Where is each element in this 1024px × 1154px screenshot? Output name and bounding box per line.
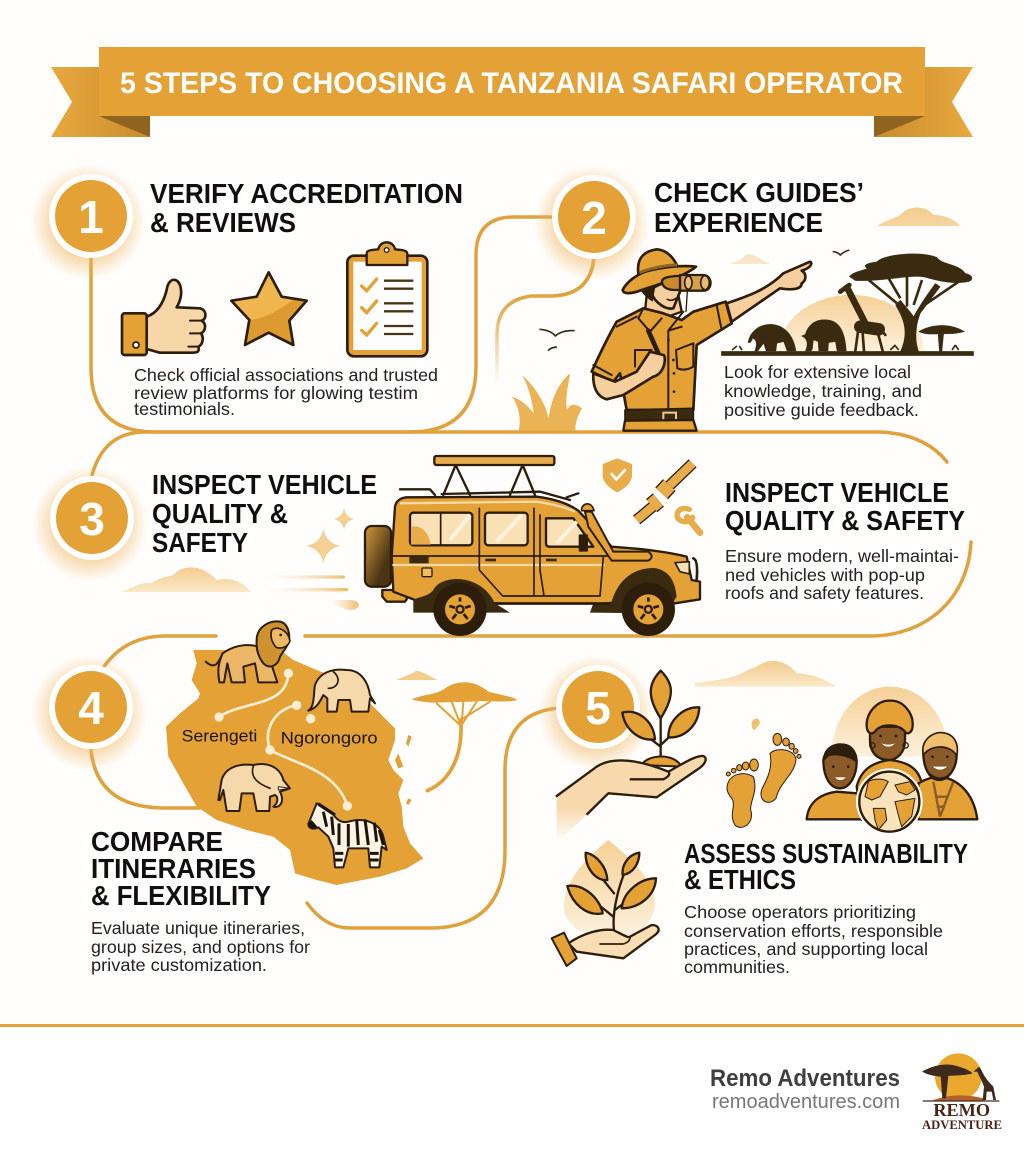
step 3 number badge: 3: [79, 493, 105, 545]
step 5 number badge: 5: [585, 682, 611, 734]
step 1 heading: & REVIEWS: [150, 207, 296, 238]
acacia trunk and branches: [895, 283, 940, 352]
step 4 heading: ITINERARIES: [91, 853, 256, 884]
community backdrop: [832, 687, 948, 757]
route lines: [219, 673, 347, 806]
guide: buttons: [667, 339, 675, 393]
front wheel: [622, 583, 675, 636]
sun: [779, 295, 924, 352]
panel: step 3: [32, 456, 965, 636]
step 5 body text: communities.: [684, 957, 790, 977]
step 2 heading: CHECK GUIDES’: [654, 177, 864, 208]
step 1 number badge: [30, 164, 146, 280]
step 3 body text: [725, 546, 959, 603]
guide: shirt details: [593, 305, 722, 410]
brand URL: remoadventures.com: [712, 1091, 900, 1113]
step 5 number badge: [538, 655, 654, 771]
step 3 body text: Ensure modern, well-maintai-: [725, 546, 959, 566]
connector path: step 4 top: [103, 636, 216, 668]
step 2 heading: EXPERIENCE: [654, 207, 823, 238]
step 1 body text: [134, 365, 438, 419]
step 2 number badge: 2: [581, 192, 607, 244]
connector path: step 3 around vehicle: [92, 432, 971, 636]
top hand: [557, 756, 706, 843]
savanna clouds: [729, 207, 960, 264]
panel: step 1: [30, 164, 463, 419]
step 4 body text: [91, 918, 310, 975]
roof rack: [400, 465, 578, 500]
connector path: step 4 bottom: [91, 750, 200, 808]
illustrations: hands, footprints, community, globe: [552, 661, 977, 966]
panel: step 4: [31, 621, 517, 975]
step 2 body text: Look for extensive local: [724, 362, 911, 382]
mirror: [579, 534, 588, 552]
guide: belt: [625, 408, 693, 421]
logo: ADVENTURE: [922, 1118, 1002, 1132]
illustration: savanna scene: [512, 207, 974, 431]
step 3 number badge: [32, 466, 148, 582]
map of Tanzania: [166, 650, 423, 885]
guide: forearm and hand: [593, 352, 665, 399]
step 5 heading: [684, 838, 968, 895]
body: [392, 497, 700, 603]
step 4 heading: & FLEXIBILITY: [91, 880, 271, 911]
acacia canopy: [849, 254, 972, 283]
logo: REMO: [933, 1100, 990, 1120]
connector path: step 2 downward: [497, 258, 594, 385]
man: [918, 733, 977, 819]
step 3 body text: roofs and safety features.: [725, 583, 924, 603]
guide: strap: [648, 331, 658, 353]
step 3 right heading: INSPECT VEHICLE: [725, 477, 949, 508]
windows: [410, 513, 472, 545]
step 1 body text: review platforms for glowing testim: [134, 383, 418, 403]
step 2 body text: positive guide feedback.: [724, 400, 919, 420]
elephant north: [308, 670, 375, 712]
panel: step 5: [538, 655, 977, 977]
lower plant in hand: [552, 840, 659, 966]
wrench icon: [677, 508, 700, 533]
doors: [393, 508, 610, 596]
step 4 body text: private customization.: [91, 955, 267, 975]
elephant south: [218, 764, 290, 811]
roof highlight and stripe: [392, 502, 605, 565]
guide: pointing arm: [727, 262, 811, 322]
step 5 body text: Choose operators prioritizing: [684, 902, 916, 922]
step 4 heading: [91, 826, 271, 911]
logo: [922, 1053, 1002, 1132]
step 5 body text: practices, and supporting local: [684, 939, 928, 959]
grass: [512, 373, 582, 431]
rear bumper: [382, 590, 407, 602]
sparkles, cloud and speed lines: [122, 508, 359, 610]
step 4 number badge: 4: [78, 682, 104, 734]
rear wheel: [433, 583, 487, 636]
boy: [807, 743, 867, 819]
guide: binoculars: [662, 276, 682, 290]
seatbelt icon: [637, 463, 693, 520]
step 2 body text: knowledge, training, and: [724, 381, 922, 401]
step 4 heading: COMPARE: [91, 826, 223, 857]
step 5 heading: & ETHICS: [684, 864, 796, 895]
step 5 body text: conservation efforts, responsible: [684, 921, 943, 941]
title banner: [51, 47, 973, 137]
headlight and grille: [675, 562, 689, 574]
woman: [857, 701, 922, 820]
step 3 left heading: INSPECT VEHICLE: [152, 469, 377, 500]
step 1 heading: [150, 178, 463, 238]
guide: hat: [638, 249, 678, 273]
globe: [857, 769, 922, 834]
savanna silhouettes: [539, 250, 974, 356]
icons: thumbs up, star, checklist: [122, 242, 427, 356]
snorkel: [585, 512, 652, 561]
map label: Ngorongoro: Ngorongoro: [281, 728, 378, 747]
connector path: map to step 5: [307, 708, 560, 928]
step 1 heading: VERIFY ACCREDITATION: [150, 178, 463, 209]
step 3 left heading: [152, 469, 377, 558]
step 4 body text: group sizes, and options for: [91, 937, 310, 957]
illustration: safari guide: [592, 249, 811, 431]
top sprout: [622, 671, 699, 767]
step 2 number badge: [534, 165, 650, 281]
title text: 5 STEPS TO CHOOSING A TANZANIA SAFARI OPERATOR: [120, 67, 903, 100]
map label: Serengeti: Serengeti: [182, 727, 257, 746]
step 4 number badge: [31, 655, 147, 771]
step 3 right heading: [725, 477, 965, 536]
giraffe: [840, 285, 885, 351]
step 3 left heading: QUALITY &: [152, 498, 288, 529]
step 2 body text: [724, 362, 922, 420]
panel: step 2: [512, 165, 974, 431]
guide: neck: [645, 295, 682, 318]
guide: head: [652, 273, 681, 309]
step 3 body text: ned vehicles with pop-up: [725, 565, 925, 585]
brand name: Remo Adventures: [710, 1065, 900, 1092]
footer: [0, 1024, 1024, 1154]
step 3 right heading: QUALITY & SAFETY: [725, 505, 965, 536]
footprints: [726, 733, 801, 827]
shield icon: [603, 458, 632, 492]
cloud: [695, 661, 837, 687]
step 1 body text: testimonials.: [134, 399, 235, 419]
connector path: step 1 to step 2: [91, 217, 555, 432]
zebra: [308, 803, 387, 867]
lion: [206, 621, 290, 682]
step 4 body text: Evaluate unique itineraries,: [91, 918, 305, 938]
step 1 body text: Check official associations and trusted: [134, 365, 438, 385]
spare tire: [365, 526, 391, 587]
step 5 body text: [684, 902, 943, 977]
illustration: Tanzania map with wildlife: [166, 621, 517, 885]
step 2 heading: [654, 177, 864, 238]
acacia tree: [396, 671, 517, 791]
illustration: safari vehicle: [365, 456, 700, 636]
wheel arches: [413, 579, 510, 613]
step 3 left heading: SAFETY: [152, 527, 248, 558]
small acacia: [919, 325, 965, 352]
step 1 number badge: 1: [78, 191, 104, 243]
guide: shirt: [592, 302, 732, 410]
